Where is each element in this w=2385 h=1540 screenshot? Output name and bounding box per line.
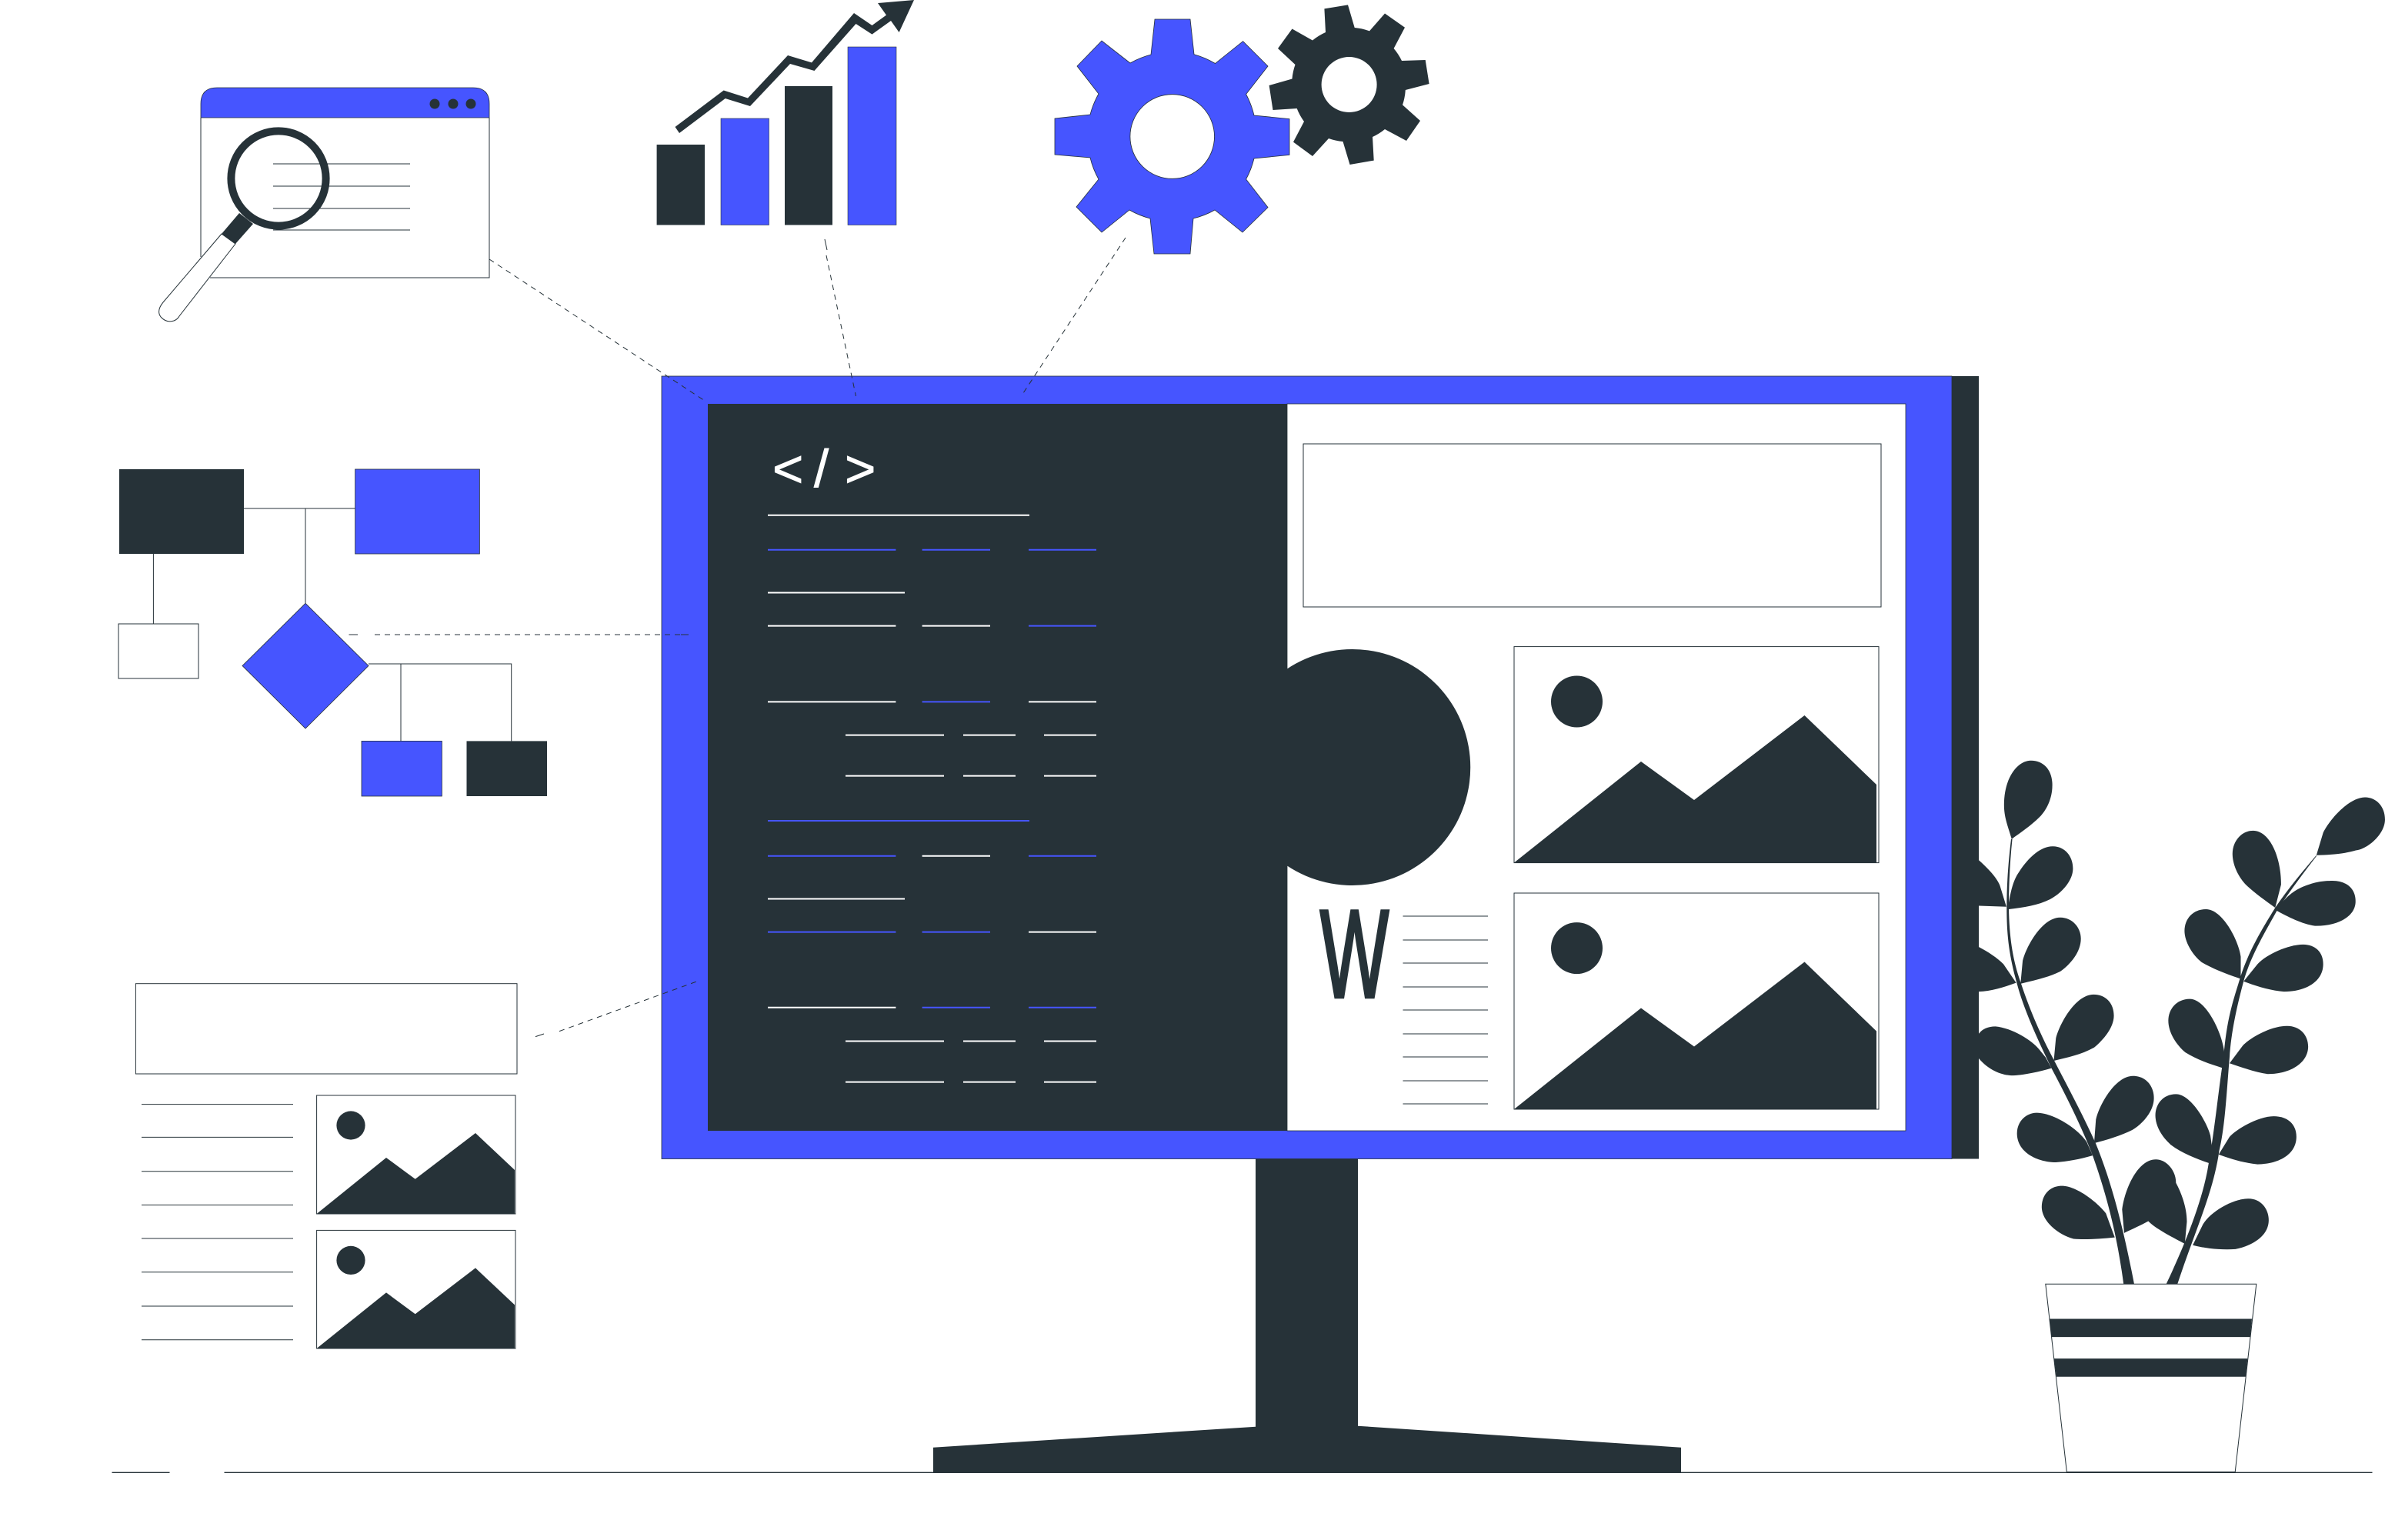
diamond bbox=[242, 603, 369, 728]
floor line bbox=[112, 1472, 2373, 1473]
code symbol: </> bbox=[772, 439, 876, 498]
text lines bbox=[273, 164, 410, 230]
flowchart bbox=[118, 469, 547, 796]
header box bbox=[135, 984, 517, 1074]
window dots bbox=[429, 98, 475, 109]
browser body bbox=[201, 118, 489, 278]
connectors bbox=[153, 508, 512, 741]
thumbnail 1 bbox=[317, 1095, 515, 1214]
thumbnail 2 bbox=[317, 1230, 515, 1348]
letter W: W bbox=[1320, 885, 1389, 1024]
code panel bbox=[708, 404, 1287, 1131]
rising arrow bbox=[675, 0, 914, 133]
image placeholder 1 bbox=[1514, 647, 1879, 863]
flower pot bbox=[2046, 1284, 2257, 1472]
bar chart with arrow bbox=[657, 0, 914, 225]
blue gear bbox=[1055, 19, 1289, 254]
text lines bbox=[142, 1105, 293, 1340]
code lines bbox=[768, 515, 1096, 1082]
header box bbox=[1303, 444, 1881, 607]
plant stems bbox=[2006, 839, 2317, 1284]
text lines bbox=[1403, 916, 1488, 1104]
dark box bbox=[119, 469, 244, 554]
monitor stand bbox=[933, 1154, 1681, 1473]
large circle bbox=[1287, 649, 1470, 885]
potted plant bbox=[1979, 761, 2385, 1472]
dashed connector lines bbox=[349, 238, 1126, 1037]
dark gear bbox=[1269, 5, 1429, 165]
monitor side edge bbox=[1946, 376, 1979, 1158]
monitor bbox=[662, 376, 1979, 1473]
small dark box bbox=[466, 741, 547, 796]
browser title bar bbox=[201, 88, 489, 118]
bars bbox=[657, 47, 896, 225]
website panel bbox=[1277, 404, 1906, 1131]
white box bbox=[118, 624, 198, 678]
gears bbox=[1055, 5, 1429, 254]
monitor frame bbox=[662, 376, 1952, 1158]
small web page layout bbox=[135, 984, 517, 1348]
browser window with magnifier bbox=[159, 88, 489, 322]
small blue box bbox=[362, 741, 442, 796]
magnifier bbox=[159, 131, 326, 322]
plant leaves bbox=[1979, 761, 2385, 1249]
blue box bbox=[355, 469, 479, 554]
image placeholder 2 bbox=[1514, 893, 1879, 1109]
